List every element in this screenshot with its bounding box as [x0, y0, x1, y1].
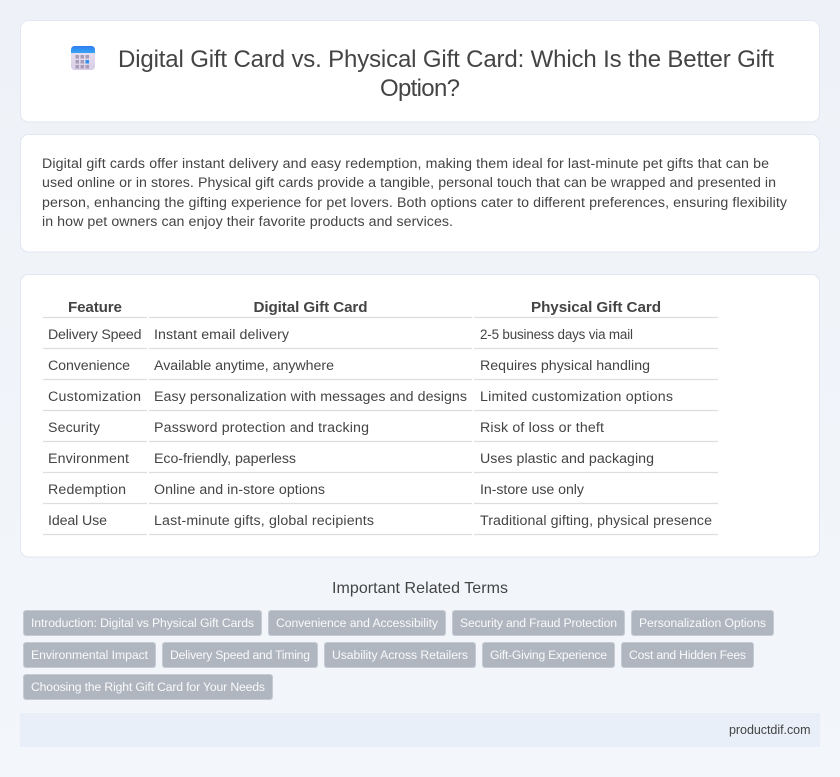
row: delivery speed	[48, 327, 633, 343]
row: redemption	[48, 482, 585, 498]
row: ideal use: Traditional gifting, physical presence	[480, 513, 712, 529]
related term tags: Introduction: Digital vs Physical Gift Cards	[31, 616, 254, 630]
row: security: Risk of loss or theft	[480, 420, 604, 436]
row: security	[48, 420, 604, 436]
row: security: Password protection and tracking	[154, 420, 369, 436]
intro paragraph: in how pet owners can enjoy their favorite products and services.	[42, 214, 453, 230]
table header row	[68, 299, 661, 316]
icon: calendar	[71, 46, 95, 70]
related term tags: Usability Across Retailers	[332, 648, 468, 662]
related term tags: Environmental Impact	[31, 648, 149, 662]
related term tags: Gift-Giving Experience	[490, 648, 607, 662]
row: customization: Limited customization options	[480, 389, 673, 405]
related term tags: Personalization Options	[639, 616, 766, 630]
intro paragraph: used online or in stores. Physical gift cards provide a tangible, personal touch that can be wrapped and presented in	[42, 175, 776, 191]
row: customization	[48, 389, 673, 405]
row: environment: Environment	[48, 451, 129, 467]
row: ideal use: Last-minute gifts, global recipients	[154, 513, 374, 529]
table header row: Physical Gift Card	[531, 299, 661, 316]
table header row: Digital Gift Card	[254, 299, 368, 316]
related terms heading: Important Related Terms	[332, 580, 508, 597]
related term tags: Delivery Speed and Timing	[170, 648, 310, 662]
row: customization: Customization	[48, 389, 141, 405]
row: environment: Eco-friendly, paperless	[154, 451, 296, 467]
related term tags: Cost and Hidden Fees	[629, 648, 746, 662]
intro paragraph: person, enhancing the gifting experience for pet lovers. Both options cater to different preferences, ensuring flexibility	[42, 195, 788, 211]
intro paragraph: Digital gift cards offer instant delivery and easy redemption, making them ideal for last-minute pet gifts that can be	[42, 156, 769, 172]
row: delivery speed: 2-5 business days via mail	[480, 327, 633, 342]
header panel	[20, 20, 820, 122]
row: convenience: Convenience	[48, 358, 130, 374]
intro text panel	[20, 134, 820, 252]
related term tags: Security and Fraud Protection	[460, 616, 617, 630]
row: ideal use: Ideal Use	[48, 513, 107, 529]
intro paragraph	[42, 156, 788, 230]
footer bar	[20, 713, 820, 747]
row: delivery speed: Instant email delivery	[154, 327, 290, 343]
table header row: Feature	[68, 299, 122, 316]
row: ideal use	[48, 513, 712, 529]
row: redemption: In-store use only	[480, 482, 585, 498]
title: Option?	[380, 75, 460, 102]
row: security: Security	[48, 420, 101, 436]
row: convenience: Available anytime, anywhere	[154, 358, 334, 374]
row: convenience: Requires physical handling	[480, 358, 650, 374]
related term tags	[24, 610, 774, 700]
row: delivery speed: Delivery Speed	[48, 327, 142, 343]
row: customization: Easy personalization with messages and designs	[154, 389, 467, 405]
comparison table panel	[20, 274, 820, 557]
row: redemption: Redemption	[48, 482, 126, 498]
footer bar: productdif.com	[729, 723, 810, 737]
title: Digital Gift Card vs. Physical Gift Card: Which Is the Better Gift	[118, 46, 774, 73]
row: environment: Uses plastic and packaging	[480, 451, 654, 467]
row: environment	[48, 451, 654, 467]
row: convenience	[48, 358, 650, 374]
related term tags: Convenience and Accessibility	[276, 616, 439, 630]
row: redemption: Online and in-store options	[154, 482, 325, 498]
related term tags: Choosing the Right Gift Card for Your Needs	[31, 680, 265, 694]
